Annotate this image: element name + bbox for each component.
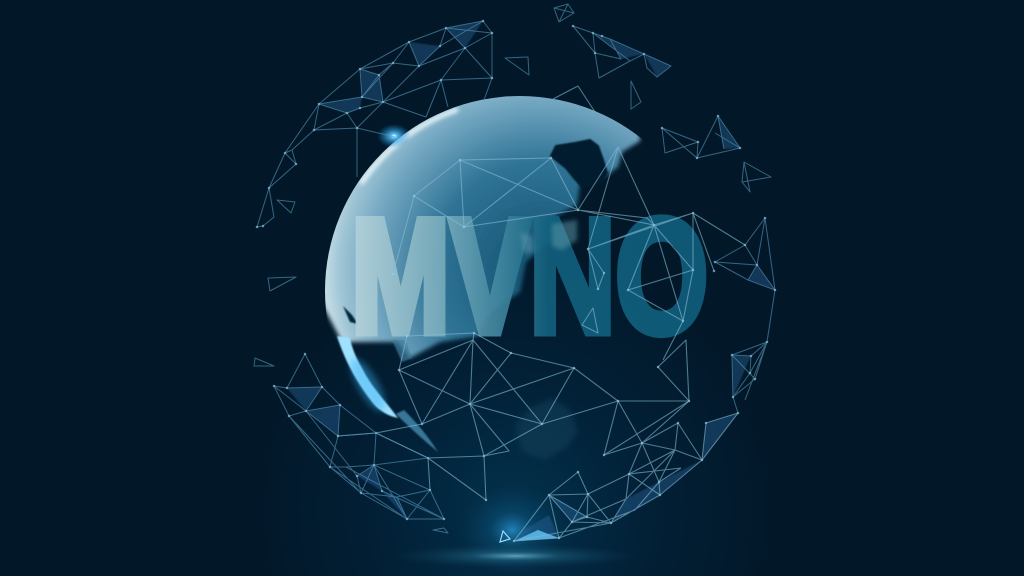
globe: land fragment below title (392, 340, 412, 362)
infographic canvas (254, 4, 776, 576)
globe: bright crescent (337, 336, 398, 418)
globe: lit hemisphere (320, 80, 640, 358)
title: MVNO: MVNO (351, 186, 708, 367)
network: top-right fragment (573, 26, 671, 78)
globe: crescent glow (344, 354, 392, 416)
network: top fragment (554, 4, 574, 22)
network: small triangle far left (254, 358, 274, 366)
network: narrow triangle (631, 81, 641, 109)
network: lower centre mesh (338, 340, 689, 500)
globe: dark islands (343, 306, 358, 324)
network: globe centre mesh (393, 86, 745, 370)
globe: faint crescent tail (396, 410, 438, 452)
network: far right triangle (742, 162, 771, 192)
globe (320, 80, 640, 460)
network: small triangle left middle (268, 277, 296, 291)
globe: bright rim highlight (362, 110, 456, 182)
network: top triangle (505, 57, 529, 75)
network: top-left arc (257, 21, 492, 227)
network: bottom-left small fragment (433, 528, 448, 533)
floor glow (390, 485, 640, 575)
network: lower-left arc (274, 354, 444, 519)
network: bottom triangle (500, 531, 510, 542)
network: bottom-right arc (514, 402, 738, 541)
network: right fragments (662, 116, 740, 158)
globe: lens flare (377, 124, 411, 148)
globe: faint Australia (515, 398, 578, 460)
land patches over title (520, 220, 577, 254)
network: small triangle left (277, 200, 295, 213)
network: right arc (715, 218, 775, 413)
globe: dark Asian landmass (551, 140, 607, 187)
